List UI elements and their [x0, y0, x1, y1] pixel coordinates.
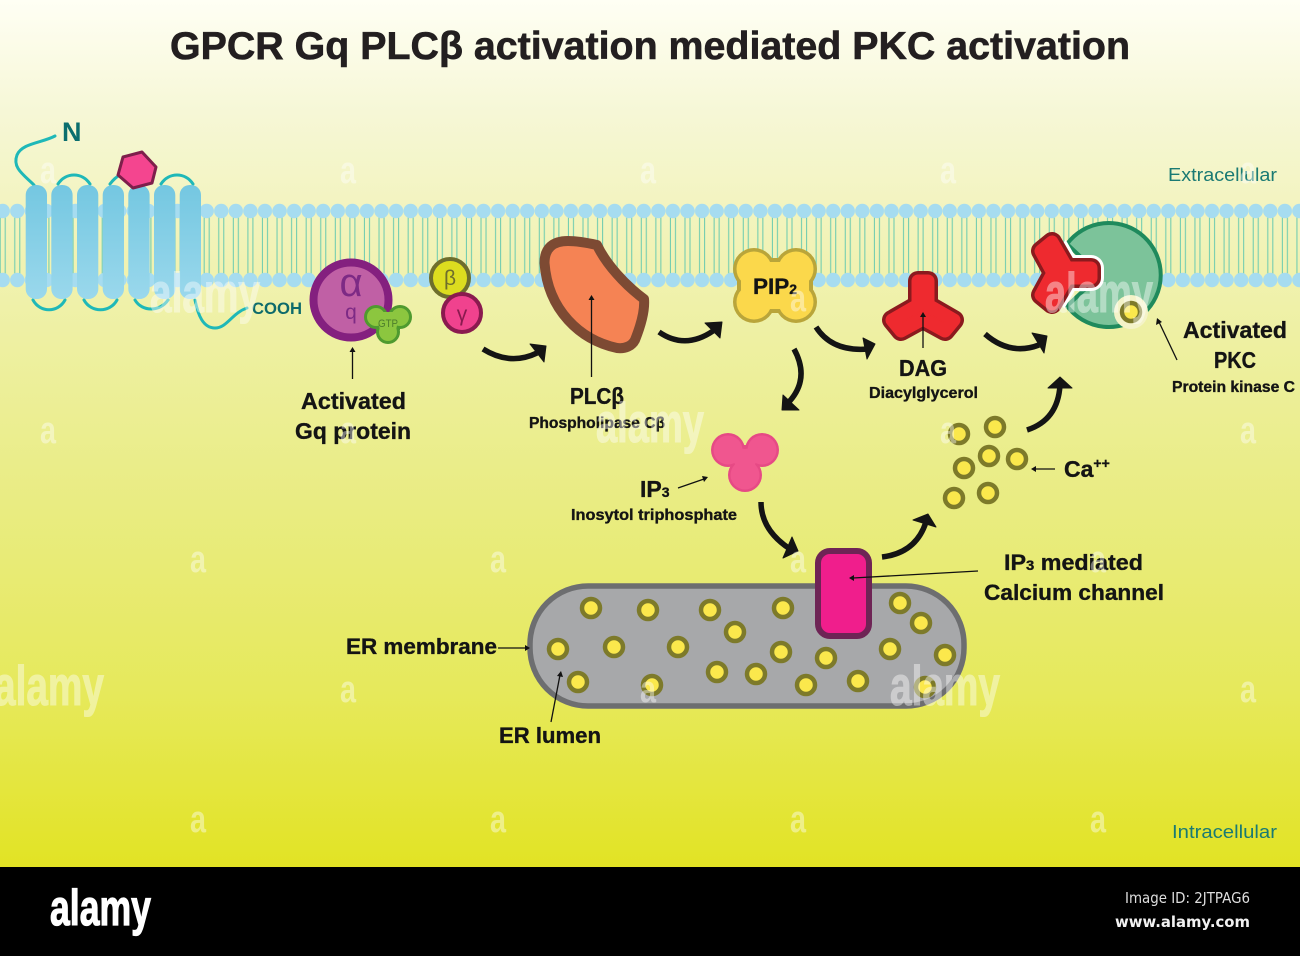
- DAG full name: Diacylglycerol: [869, 385, 978, 402]
- image id: Image ID: 2JTPAG6: [1125, 889, 1250, 907]
- channel text line 1: IP3 mediated: [1004, 550, 1143, 575]
- PKC label: [1172, 317, 1295, 396]
- C terminus: [195, 300, 247, 328]
- COOH label: COOH: [252, 300, 302, 318]
- PIP2 molecule: [733, 248, 817, 323]
- DAG bound to PKC: [1041, 242, 1091, 304]
- receptor loops: [33, 175, 193, 310]
- arrow: channel to calcium: [882, 514, 936, 557]
- channel text line 2: Calcium channel: [984, 580, 1164, 605]
- DAG label: DAG: [899, 355, 947, 381]
- ER lumen label: ER lumen: [499, 723, 601, 748]
- PIP2 label: PIP2: [753, 274, 797, 299]
- stock watermarks: a: [1090, 539, 1107, 581]
- transmembrane helices: [26, 185, 201, 299]
- IP3 calcium channel: [818, 551, 869, 636]
- stock watermarks: a: [190, 539, 207, 581]
- website: www.alamy.com: [1115, 913, 1250, 931]
- beta gamma subunits: [431, 259, 481, 332]
- calcium bound to PKC: [1114, 295, 1148, 329]
- arrow: PIP2 to DAG: [816, 327, 875, 359]
- GTP cluster: GTP: [378, 318, 398, 330]
- Gq text line 2: Gq protein: [295, 418, 411, 444]
- cell membrane lipid bilayer: [0, 203, 1300, 288]
- stock watermarks: a: [340, 410, 357, 452]
- activated PKC enzyme: [1041, 223, 1161, 329]
- activated Gq protein: [314, 261, 412, 344]
- stock watermarks: a: [790, 539, 807, 581]
- stock watermarks: a: [40, 150, 57, 192]
- N terminus: [16, 136, 55, 185]
- stock watermarks: a: [1240, 669, 1257, 711]
- gamma subunit: [443, 294, 481, 332]
- pointer: ER lumen: [551, 671, 563, 722]
- stock watermarks: alamy: [596, 391, 704, 454]
- q letter: q: [345, 301, 357, 324]
- ER calcium ions: [549, 594, 954, 696]
- arrow: IP3 to channel: [761, 502, 798, 558]
- stock watermarks: alamy: [150, 261, 260, 324]
- arrow: PIP2 to IP3: [782, 349, 801, 410]
- Gq label: [295, 347, 411, 444]
- stock watermarks: a: [1090, 799, 1107, 841]
- stock watermarks: a: [940, 150, 957, 192]
- ER body: [530, 586, 964, 706]
- GPCR receptor: [16, 117, 302, 328]
- N label: N: [62, 117, 82, 147]
- PKC text line 1: Activated: [1183, 317, 1287, 343]
- pointer: PLC: [588, 295, 594, 377]
- footer bar: [0, 867, 1300, 956]
- PLC label: PLCβ: [570, 383, 624, 409]
- stock watermarks: a: [940, 410, 957, 452]
- stock watermarks: a: [340, 150, 357, 192]
- stock watermarks: a: [490, 539, 507, 581]
- endoplasmic reticulum: [530, 586, 964, 706]
- stock watermarks: a: [790, 278, 807, 320]
- calcium label: ++: [1093, 455, 1110, 471]
- stock watermarks: a: [40, 410, 57, 452]
- stock watermarks: a: [640, 669, 657, 711]
- alamy logo: alamy: [50, 880, 151, 936]
- PKC text line 2: PKC: [1214, 347, 1256, 373]
- arrow: PLC to PIP2: [659, 322, 722, 341]
- label: intracellular: Intracellular: [1172, 821, 1277, 842]
- pointer: Gq: [350, 347, 356, 379]
- ER membrane label: ER membrane: [346, 634, 497, 659]
- PKC full name: Protein kinase C: [1172, 379, 1295, 396]
- ligand hexagon: [118, 152, 156, 188]
- stock watermarks: alamy: [890, 654, 1000, 717]
- pointer: PKC: [1156, 318, 1177, 360]
- stock watermarks: a: [340, 669, 357, 711]
- calcium label: Ca: [1064, 456, 1093, 482]
- beta symbol: β: [444, 267, 456, 290]
- pointer: calcium channel: [849, 571, 978, 581]
- IP3 molecule: [711, 433, 779, 492]
- stock watermarks: [0, 150, 1257, 841]
- alpha symbol: α: [339, 261, 363, 305]
- stock watermarks: a: [190, 799, 207, 841]
- label: extracellular: Extracellular: [1168, 164, 1277, 185]
- arrow: Gq to PLC: [483, 344, 546, 362]
- beta subunit: [431, 259, 469, 297]
- IP3 label: IP3: [640, 476, 670, 502]
- arrow: calcium to PKC: [1027, 377, 1072, 430]
- Gq text line 1: Activated: [301, 388, 406, 414]
- PLC full name: Phospholipase Cβ: [529, 415, 665, 432]
- DAG molecule: [892, 281, 954, 331]
- pointer: IP3: [678, 476, 708, 488]
- alpha q subunit: [314, 262, 388, 338]
- PKC body: [1067, 223, 1161, 327]
- stock watermarks: a: [640, 150, 657, 192]
- stock watermarks: alamy: [1045, 261, 1153, 324]
- IP3 full name: Inosytol triphosphate: [571, 507, 737, 524]
- free calcium ions: [945, 418, 1026, 507]
- pointer: ER membrane: [498, 645, 530, 651]
- title: GPCR Gq PLCβ activation mediated PKC activation: [170, 25, 1130, 68]
- pointer: calcium: [1031, 466, 1055, 472]
- arrow: DAG to PKC: [985, 333, 1047, 353]
- stock watermarks: a: [490, 799, 507, 841]
- stock watermarks: a: [1240, 410, 1257, 452]
- stock watermarks: a: [1240, 150, 1257, 192]
- PLC beta enzyme: [544, 241, 644, 348]
- pointer: DAG: [920, 312, 926, 348]
- stock watermarks: a: [790, 799, 807, 841]
- channel label: [984, 550, 1164, 605]
- gamma symbol: γ: [457, 303, 468, 326]
